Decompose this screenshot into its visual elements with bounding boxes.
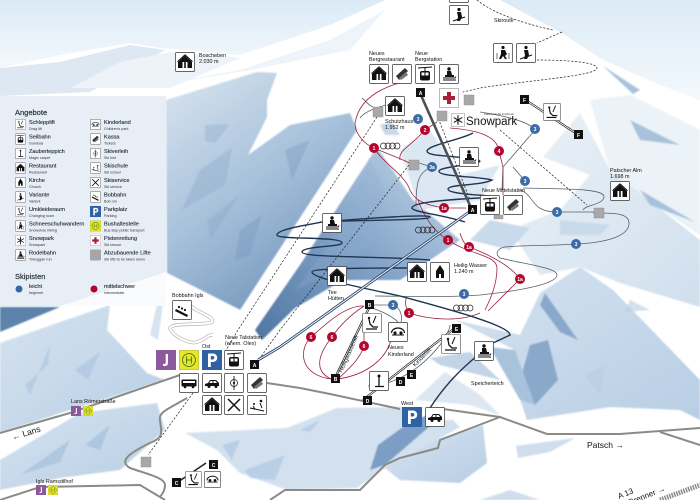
legend column 1: Kirche xyxy=(29,178,45,184)
legend column 1: Zauberteppich xyxy=(29,149,65,155)
blue piste markers: 3 xyxy=(556,210,559,216)
legend column 1: Rodelbahn xyxy=(29,250,56,256)
legend column 1: Snowpark xyxy=(29,243,46,247)
red piste markers: 1a xyxy=(517,277,523,283)
area labels: Kinderland xyxy=(388,352,414,358)
legend column 2: Pistenrettung xyxy=(104,236,137,242)
legend column 2 xyxy=(90,119,151,262)
area labels: (ehem. Olex) xyxy=(225,341,256,347)
lift lines xyxy=(178,93,577,482)
place labels: road directions xyxy=(11,424,667,500)
legend column 1: Snowpark xyxy=(29,236,54,242)
area labels: Hütten xyxy=(328,296,344,302)
area labels: Speicherteich xyxy=(471,381,504,387)
blue piste markers xyxy=(388,114,581,310)
red piste markers: 2 xyxy=(424,128,427,134)
legend column 2: Parkplatz xyxy=(104,207,128,213)
legend column 1: Changing room xyxy=(29,214,54,218)
legend column 1: Toboggan run xyxy=(29,258,52,262)
area labels: 1.952 m xyxy=(385,125,405,131)
area labels: Lans Römerstraße xyxy=(71,399,116,405)
lifts to be removed xyxy=(141,95,604,467)
lift station letters: F xyxy=(523,98,526,104)
legend column 2: Ski school xyxy=(104,170,121,174)
lift station letters xyxy=(172,88,583,487)
lift station letters: C xyxy=(175,481,179,487)
area labels: Neue Talstation xyxy=(225,335,262,341)
lift station letters: D xyxy=(366,399,370,405)
legend column 2: Bushaltestelle xyxy=(104,222,139,228)
legend column 2: Ski rescue xyxy=(104,243,121,247)
area labels: Tee xyxy=(328,290,337,296)
blue piste markers: 3 xyxy=(417,117,420,123)
legend column 2: Kassa xyxy=(104,134,120,140)
legend column 2: Bus stop public transport xyxy=(104,228,145,232)
ski routes and dashed lines xyxy=(148,0,597,455)
red piste markers: 6 xyxy=(331,335,334,341)
legend column 2: Skischule xyxy=(104,164,128,170)
area labels: West xyxy=(401,401,414,407)
legend column 1: Magic carpet xyxy=(29,156,50,160)
legend column 2: Bob run xyxy=(104,200,117,204)
legend column 2: Ski hire xyxy=(104,156,116,160)
place labels: road directions: ← Lans xyxy=(11,424,42,442)
legend column 1: Variante xyxy=(29,192,49,198)
legend column 1: Restaurant xyxy=(29,170,47,174)
legend column 1: Drag lift xyxy=(29,127,42,131)
legend: piste classes: intermediate xyxy=(104,291,124,295)
legend column 2: Bobbahn xyxy=(104,192,126,198)
red piste markers: 1a xyxy=(466,245,472,251)
blue piste markers: 3 xyxy=(534,127,537,133)
area labels: Patscherkofel Innsbruck xyxy=(484,112,514,116)
blue piste markers: 3 xyxy=(463,292,466,298)
legend column 1: Seilbahn xyxy=(29,134,51,140)
area labels: 1.240 m xyxy=(454,269,474,275)
legend: piste classes: mittelschwer xyxy=(104,284,135,290)
place labels: road directions: Patsch → xyxy=(587,440,624,450)
area labels: 1.698 m xyxy=(610,174,630,180)
legend column 1: Restaurant xyxy=(29,164,57,170)
legend column 1: Snowshoe hiking xyxy=(29,228,57,232)
lift station letters: C xyxy=(212,463,216,469)
legend column 2: Parking xyxy=(104,214,117,218)
icon tiles: middle xyxy=(322,196,522,390)
area labels: Patscher Alm xyxy=(610,168,642,174)
lift station letters: E xyxy=(410,373,414,379)
blue pistes xyxy=(360,98,629,386)
legend heading: Angebote: Angebote xyxy=(15,108,47,117)
area labels: Neue Mittelstation xyxy=(482,188,525,194)
panel: legend xyxy=(0,96,166,306)
red piste markers: 6 xyxy=(310,335,313,341)
legend: piste classes: leicht xyxy=(29,284,43,290)
lift station letters: A xyxy=(253,363,257,369)
blue piste markers: 3a xyxy=(429,165,435,171)
area labels: Boscheben xyxy=(199,53,226,59)
lift names: Heiligwasserlift xyxy=(338,335,360,374)
toboggan run xyxy=(277,133,510,408)
area labels: Neues xyxy=(369,51,385,57)
legend column 2: Ski service xyxy=(104,185,122,189)
legend heading: Skipisten: Skipisten xyxy=(15,272,45,281)
icon tiles: top xyxy=(176,0,630,200)
lift station letters: E xyxy=(455,327,459,333)
area labels: Schutzhaus xyxy=(385,119,413,125)
red pistes xyxy=(303,82,520,379)
area labels: Neue xyxy=(415,51,428,57)
red piste markers xyxy=(306,125,525,351)
legend column 2: Skiverleih xyxy=(104,149,128,155)
blue piste markers: 3 xyxy=(575,242,578,248)
lift station letters: A xyxy=(471,208,475,214)
bobsleigh track xyxy=(170,305,213,343)
lift names: Kinderlift xyxy=(412,347,433,368)
legend: piste classes: beginner xyxy=(29,291,44,295)
red piste markers: 1 xyxy=(447,238,450,244)
legend column 2: Abzubauende Lifte xyxy=(104,250,151,256)
red piste markers: 1a xyxy=(441,206,447,212)
area labels: Igls Ramsdilhof xyxy=(36,479,73,485)
roads xyxy=(0,375,700,500)
legend column 1: Umkleideraum xyxy=(29,207,65,213)
lift station letters: A xyxy=(419,91,423,97)
legend column 2: Ski lifts to be taken down xyxy=(104,258,145,262)
red piste markers: 6 xyxy=(363,344,366,350)
red piste markers: 1 xyxy=(408,311,411,317)
area labels: Bergstation xyxy=(415,57,442,63)
legend column 1: Schneeschuhwandern xyxy=(29,222,84,228)
area labels: Bergrestaurant xyxy=(369,57,405,63)
red piste markers: 1 xyxy=(373,146,376,152)
blue piste markers: 3 xyxy=(392,303,395,309)
blue piste markers: 3 xyxy=(524,179,527,185)
lift station letters: B xyxy=(368,303,372,309)
legend: piste classes xyxy=(16,284,135,295)
legend column 1: Gondola xyxy=(29,142,44,146)
area labels: 2.030 m xyxy=(199,59,219,65)
legend column 1 xyxy=(15,119,84,262)
area labels: Snowpark xyxy=(466,116,517,128)
legend column 1: Varient xyxy=(29,200,40,204)
area labels: Heilig Wasser xyxy=(454,263,487,269)
icon tiles: base station xyxy=(36,300,444,495)
legend column 2: Children's park xyxy=(104,127,129,131)
legend column 2: Tickets xyxy=(104,142,116,146)
legend column 2: Kinderland xyxy=(104,120,131,126)
legend column 1: Church xyxy=(29,185,41,189)
lift station letters: F xyxy=(577,133,580,139)
lift names xyxy=(338,335,433,374)
area labels: Neues xyxy=(388,345,404,351)
olympic rings xyxy=(380,143,473,311)
lift station letters: B xyxy=(334,377,338,383)
area labels: Bobbahn Igls xyxy=(172,293,204,299)
area labels: Ost xyxy=(202,344,211,350)
legend column 1: Schlepplift xyxy=(29,120,55,126)
area labels: Skiroute xyxy=(494,18,514,24)
red piste markers: 4 xyxy=(498,149,501,155)
lift station letters: D xyxy=(399,380,403,386)
legend column 2: Skiservice xyxy=(104,178,130,184)
